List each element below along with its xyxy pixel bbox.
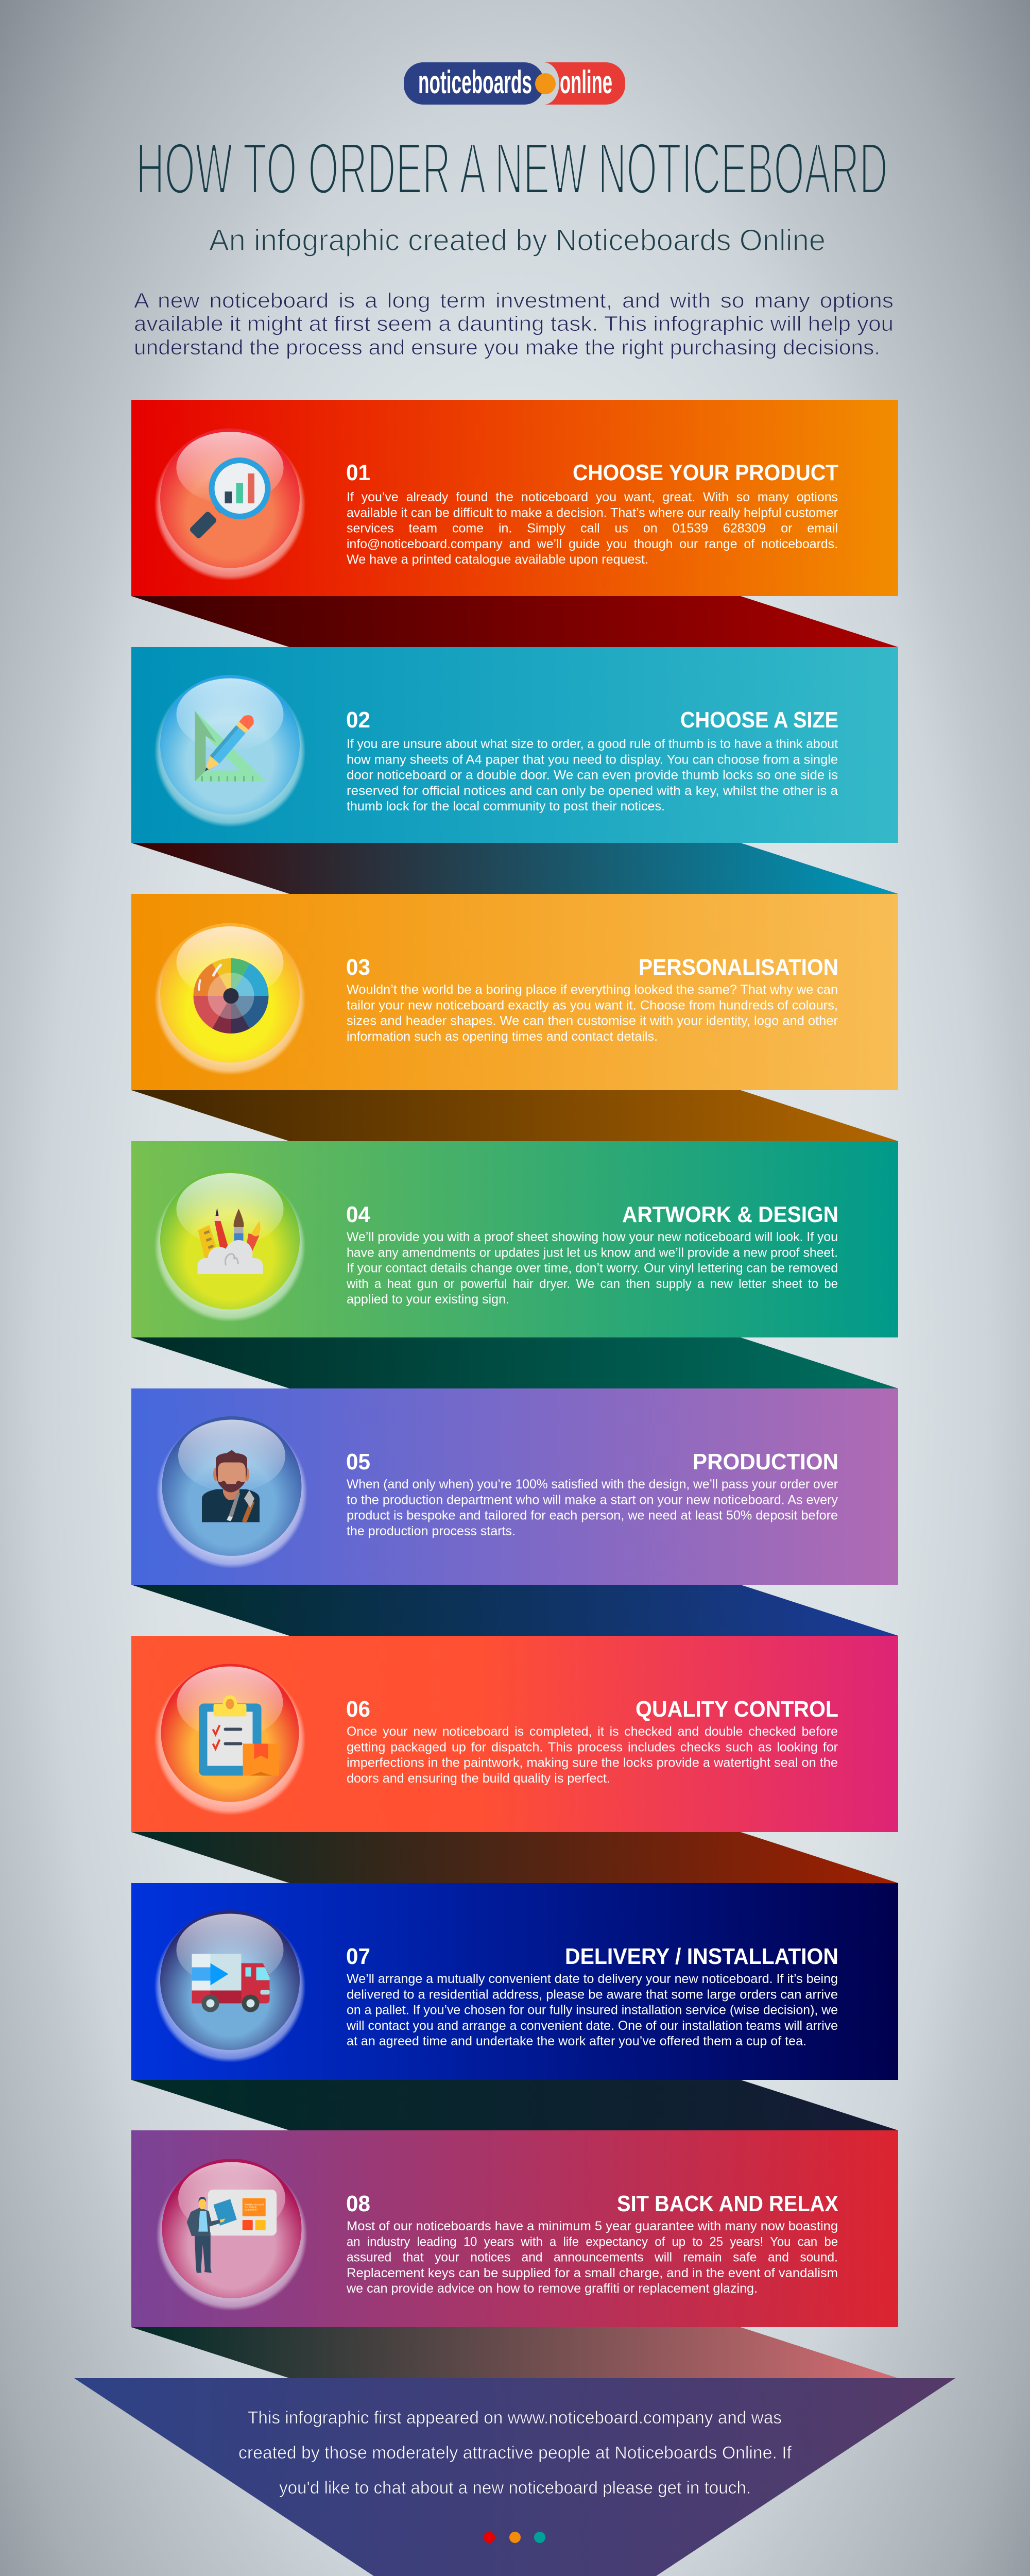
body text: Replacement keys can be supplied for a small charge, and in the event of vandalism [347,2266,838,2280]
subtitle: An infographic created by Noticeboards Online [209,224,826,257]
body text: the production process starts. [347,1524,516,1538]
icon: presenter at board: You Multiply [245,2206,257,2208]
body text: how many sheets of A4 paper that you need to display. You can choose from a single [347,752,838,767]
panel 8 shadow band [131,2327,898,2378]
panel 2 shadow band [131,843,898,894]
body text: door noticeboard or a double door. We can even provide thumb locks so one side is [347,768,838,782]
heading: DELIVERY / INSTALLATION [565,1944,838,1969]
panel 4: artwork and design [131,1141,898,1388]
icon: set square and pencil [154,675,306,827]
body text: If you are unsure about what size to order, a good rule of thumb is to have a think about [347,737,838,751]
body text: If your contact details change over time, don’t worry. Our vinyl lettering can be removed [347,1261,838,1276]
body text: thumb lock for the local community to post their notices. [347,799,665,814]
heading: PERSONALISATION [639,955,838,980]
body text: imperfections in the paintwork, making sure the locks provide a watertight seal on the [347,1756,838,1770]
body text: will contact you and arrange a convenient date. One of our installation teams will arrive [346,2019,838,2033]
icon: pencils and brush on cloud [154,1170,306,1322]
body text: reserved for official notices and can only be opened with a key, whilst the other is a [347,784,838,798]
body text [346,1972,838,2048]
panel 5 shadow band [131,1585,898,1636]
body text: Most of our noticeboards have a minimum 5 year guarantee with many now boasting [347,2219,838,2233]
panel 5 background [131,1388,898,1585]
panel 7 background [131,1883,898,2080]
body text: doors and ensuring the build quality is perfect. [347,1771,610,1786]
body text [346,2219,838,2296]
closing text: created by those moderately attractive people at Noticeboards Online. If [238,2443,792,2463]
intro text [134,289,894,359]
number 07: 07 [346,1944,370,1969]
panel 1: choose your product [131,400,898,647]
icon: delivery truck [154,1910,306,2063]
body text: with a heat gun or powerful hair dryer. We can then supply a new letter sheet to be [346,1277,838,1291]
closing triangle panel [74,2378,955,2576]
icon: magnifier with bar chart [154,429,306,581]
body text: assured that your notices and announcements will remain safe and sound. [347,2250,838,2265]
body text: When (and only when) you’re 100% satisfied with the design, we’ll pass your order over [347,1477,838,1492]
panel 8 background [131,2130,898,2327]
panel 1 background [131,400,898,596]
body text [347,1724,838,1786]
heading: CHOOSE YOUR PRODUCT [573,460,838,485]
body text [347,490,838,567]
body text [347,737,838,814]
number 06: 06 [346,1697,370,1722]
panel 6: quality control [131,1636,898,1883]
number 04: 04 [346,1202,370,1227]
heading: ARTWORK & DESIGN [622,1202,838,1227]
number 08: 08 [346,2191,370,2216]
body text: have any amendments or updates just let us know and we’ll provide a new proof sheet. [347,1245,838,1260]
icon: colour wheel [154,923,306,1075]
body text: we can provide advice on how to remove graffiti or replacement glazing. [346,2281,758,2296]
body text: sizes and header shapes. We can then customise it with your identity, logo and other [347,1014,838,1028]
body text: product is bespoke and tailored for each person, we need at least 50% deposit before [347,1509,838,1523]
body text: Wouldn’t the world be a boring place if everything looked the same? That why we can [347,982,838,997]
body text: an industry leading 10 years with a life expectancy of up to 25 years! You can be [347,2234,838,2249]
body text: to the production department who will make a start on your new noticeboard. As every [347,1493,838,1507]
body text: Once your new noticeboard is completed, it is checked and double checked before [347,1724,838,1739]
body text: We have a printed catalogue available upon request. [347,552,648,567]
intro text: available it might at first seem a daunting task. This infographic will help you [134,312,894,335]
closing text: you'd like to chat about a new noticeboard please get in touch. [279,2478,751,2498]
heading: CHOOSE A SIZE [680,707,838,733]
panel 7: delivery and installation [131,1883,898,2130]
three dots [484,2532,545,2543]
number 01: 01 [346,460,370,485]
body text: tailor your new noticeboard exactly as you want it. Choose from hundreds of colours, [347,998,838,1012]
panel 1 shadow band [131,596,898,647]
heading: QUALITY CONTROL [636,1697,838,1722]
icon: clipboard and box [154,1664,306,1816]
body text: info@noticeboard.company and we’ll guide you though our range of noticeboards. [347,537,838,551]
panel 3: personalisation [131,894,898,1141]
panel 2 background [131,647,898,843]
body text [346,1230,838,1307]
closing text: This infographic first appeared on www.noticeboard.company and was [248,2408,782,2428]
panel 7 shadow band [131,2080,898,2130]
intro text: A new noticeboard is a long term investment, and with so many options [134,289,894,312]
body text: services team come in. Simply call us on 01539 628309 or email [347,521,838,536]
panel 2: choose a size [131,647,898,894]
heading: PRODUCTION [693,1449,838,1475]
logo: header: online [560,64,612,100]
icon: presenter at board [156,2159,307,2311]
body text: getting packaged up for dispatch. This process includes checks such as looking for [347,1740,838,1754]
body text: If you’ve already found the noticeboard you want, great. With so many options [347,490,838,504]
number 05: 05 [346,1449,370,1475]
body text: We’ll arrange a mutually convenient date to delivery your new noticeboard. If it’s being [347,1972,838,1986]
body text [347,982,838,1044]
icon: bearded craftsman [156,1416,307,1568]
body text: on a pallet. If you’ve chosen for our fully insured installation service (wise decision), we [347,2003,838,2018]
body text [347,1477,838,1538]
intro text: understand the process and ensure you make the right purchasing decisions. [134,335,880,359]
body text: available it can be difficult to make a decision. That’s where our really helpful customer [347,506,838,520]
logo: header: noticeboards [418,64,532,100]
icon: presenter at board: What Do You Get If [245,2203,264,2206]
panel 4 background [131,1141,898,1337]
number 03: 03 [346,955,370,980]
body text: applied to your existing sign. [347,1292,509,1307]
panel 5: production [131,1388,898,1636]
number 02: 02 [346,707,370,733]
panel 8: sit back and relax [131,2130,898,2378]
panel 6 background [131,1636,898,1832]
body text: information such as opening times and contact details. [347,1029,658,1044]
body text: at an agreed time and undertake the work after you’ve offered them a cup of tea. [347,2034,806,2048]
panel 3 background [131,894,898,1090]
panel 4 shadow band [131,1337,898,1388]
body text: delivered to a residential address, please be aware that some large orders can arrive [347,1987,838,2002]
closing text [238,2408,792,2498]
heading: SIT BACK AND RELAX [617,2191,838,2216]
body text: We’ll provide you with a proof sheet showing how your new noticeboard will look. If you [347,1230,838,1244]
panel 6 shadow band [131,1832,898,1883]
icon: presenter at board: Six By Nine? [245,2208,258,2211]
panel 3 shadow band [131,1090,898,1141]
